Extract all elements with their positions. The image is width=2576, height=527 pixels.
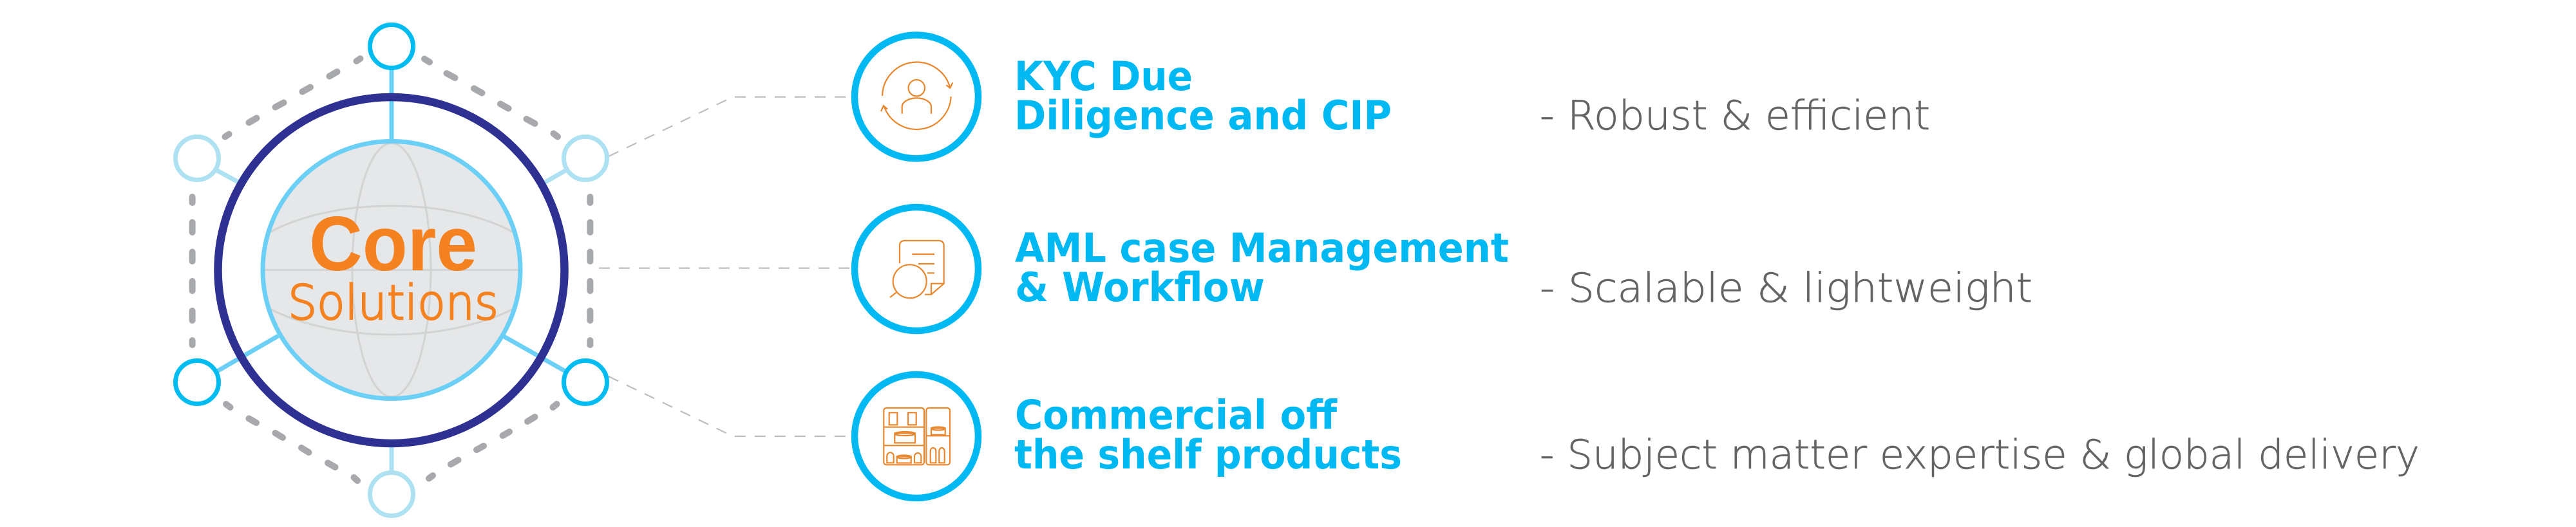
heading: KYC: KYC Due	[1014, 53, 1193, 100]
heading: KYC: Diligence and CIP	[1014, 92, 1392, 139]
hexagon: dashed outline	[193, 59, 590, 481]
connector: dashed leader lines	[599, 97, 851, 436]
icon circle: AML	[855, 207, 978, 331]
heading: AML: & Workflow	[1015, 264, 1265, 311]
heading: KYC	[1014, 53, 1392, 139]
heading: commercial	[1014, 392, 1402, 478]
heading: AML: AML case Management	[1015, 225, 1509, 272]
text: Subject matter expertise and global delivery: - Subject matter expertise & global delivery	[1540, 431, 2420, 478]
icon circle: KYC	[855, 35, 978, 158]
item: KYC Due Diligence and CIP	[855, 35, 1392, 158]
text: Scalable and lightweight: - Scalable & lightweight	[1540, 264, 2032, 311]
nodes	[175, 24, 607, 516]
heading: commercial: the shelf products	[1014, 431, 1402, 478]
heading: commercial: Commercial off	[1015, 392, 1338, 439]
connector spokes	[217, 68, 565, 472]
title: Core Solutions	[288, 201, 498, 331]
title: Core Solutions: Solutions	[288, 275, 498, 331]
heading: AML	[1015, 225, 1509, 311]
outer navy ring	[218, 97, 564, 443]
item: Commercial off the shelf products	[855, 374, 1402, 498]
text: Robust and efficient: - Robust & efficient	[1540, 92, 1930, 139]
title: Core Solutions: Core	[309, 201, 477, 287]
icon: rotating person	[881, 62, 952, 129]
globe	[263, 142, 520, 399]
icon: product shelves	[884, 408, 950, 465]
icon: document with magnifier	[890, 241, 944, 298]
item: AML case Management and Workflow	[855, 207, 1509, 331]
icon circle: commercial	[855, 374, 978, 498]
